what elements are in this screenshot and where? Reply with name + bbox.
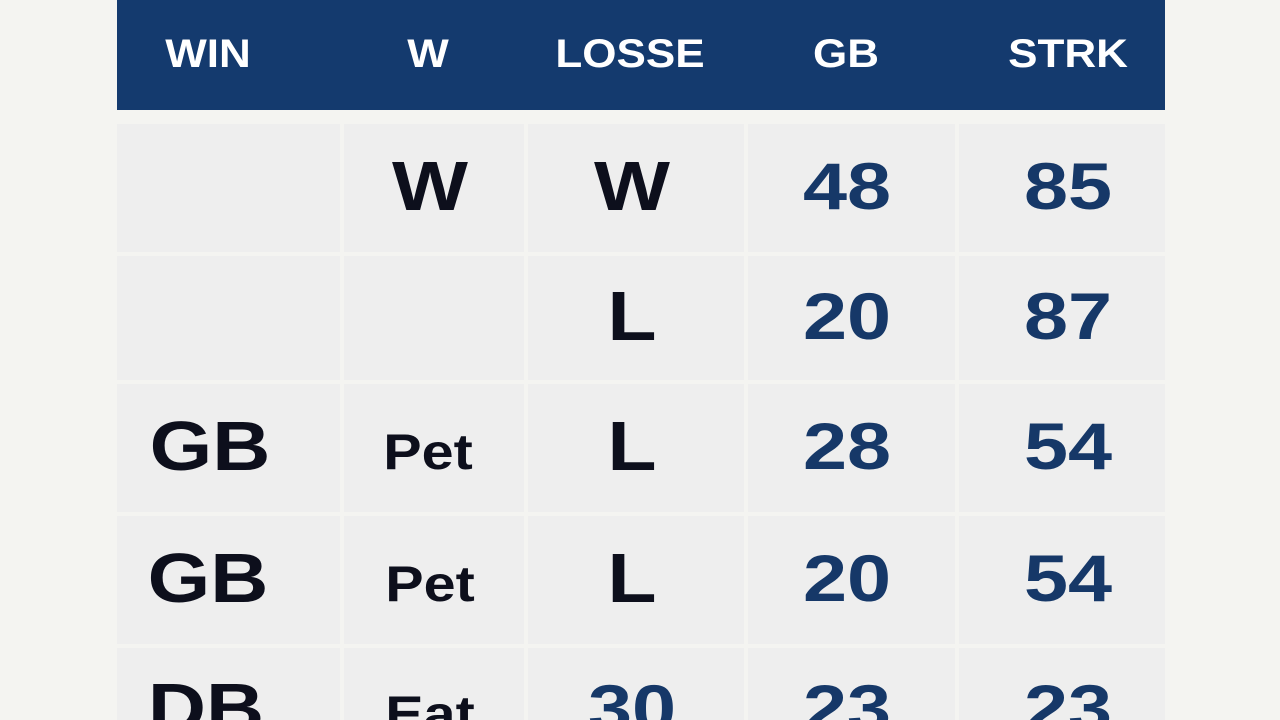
row 1: 85 [1024, 149, 1112, 223]
row 3: Pet [383, 424, 473, 480]
row 4 [148, 539, 1112, 617]
row 4: L [607, 539, 657, 617]
row 4: Pet [385, 556, 475, 612]
row 3 [150, 407, 1112, 485]
row 2: L [607, 277, 657, 355]
row 1: 48 [803, 149, 891, 223]
header labels [165, 32, 1128, 76]
row 1: W [392, 147, 468, 225]
row 2: 87 [1024, 279, 1112, 353]
row 2: 20 [803, 279, 891, 353]
row 5 [148, 669, 1112, 720]
header labels: W [407, 32, 449, 76]
row 3: 54 [1024, 409, 1112, 483]
row 4: 54 [1024, 541, 1112, 615]
row 4: GB [148, 539, 268, 617]
header labels: WIN [165, 32, 251, 76]
row 3: GB [150, 407, 270, 485]
row 3: L [607, 407, 657, 485]
header labels: LOSSE [555, 32, 705, 76]
row 4: 20 [803, 541, 891, 615]
row 3: 28 [803, 409, 891, 483]
header labels: STRK [1008, 32, 1128, 76]
row 1: W [594, 147, 670, 225]
header bar [117, 0, 1165, 110]
row 1 [392, 147, 1112, 225]
header labels: GB [813, 32, 879, 76]
row 2 [607, 277, 1112, 355]
